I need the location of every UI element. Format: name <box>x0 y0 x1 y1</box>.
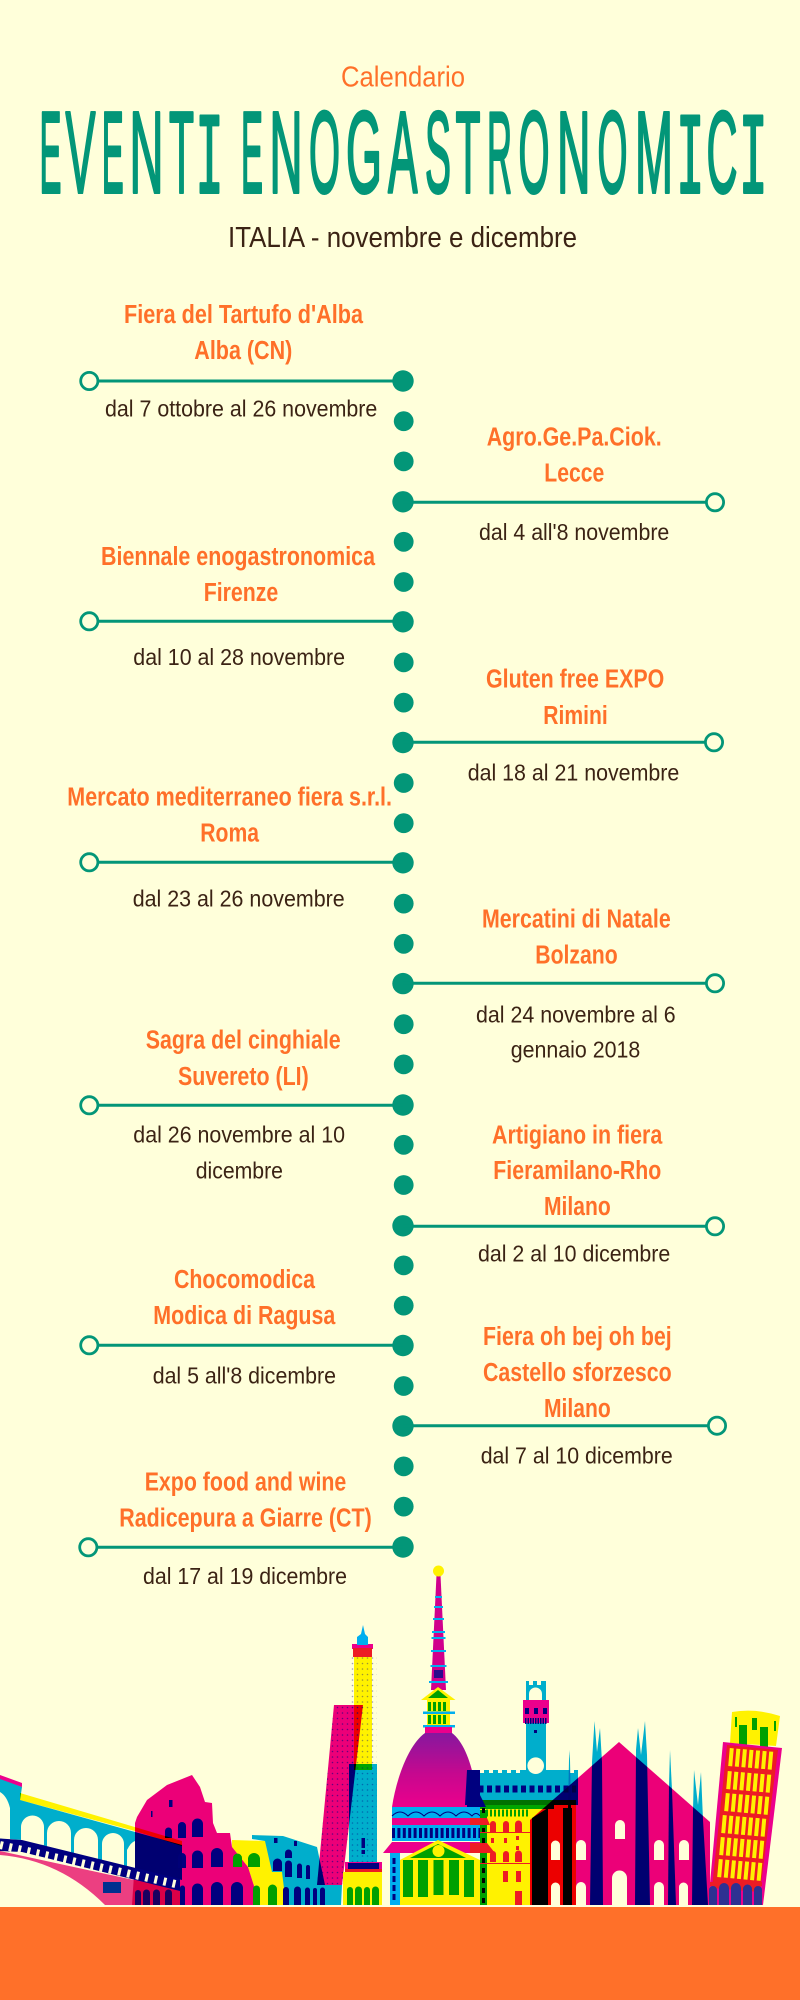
event: Mercato mediterraneo: Roma <box>200 820 260 848</box>
event: Mercato mediterraneo: Mercato mediterraneo fiera s.r.l. <box>67 784 392 812</box>
event: Sagra del cinghiale: dicembre <box>196 1158 283 1184</box>
title: I <box>196 96 224 228</box>
event: Fiera oh bej oh bej: Fiera oh bej oh bej <box>483 1323 672 1351</box>
event: Chocomodica: Chocomodica <box>174 1266 316 1294</box>
event: Fiera del Tartufo d'Alba <box>81 301 403 422</box>
event: Sagra del cinghiale: Suvereto (LI) <box>178 1063 309 1091</box>
title: G <box>346 88 382 218</box>
title: E <box>102 88 124 218</box>
event: Mercato mediterraneo <box>67 784 403 912</box>
title: N <box>270 88 302 218</box>
event: Expo food and wine: Radicepura a Giarre (CT) <box>119 1505 372 1533</box>
landmark: Duomo di Milano <box>530 1721 710 1905</box>
event: Sagra del cinghiale: dal 26 novembre al 10 <box>133 1122 345 1148</box>
event: Artigiano in fiera: Artigiano in fiera <box>492 1121 663 1149</box>
event: Expo food and wine <box>80 1469 403 1589</box>
title: O <box>309 88 340 218</box>
title: A <box>388 88 418 218</box>
event: Fiera oh bej oh bej: Castello sforzesco <box>483 1359 672 1387</box>
title: E <box>40 88 62 218</box>
title: E <box>241 88 263 218</box>
event: Agro.Ge.Pa.Ciok.: dal 4 all'8 novembre <box>479 519 669 545</box>
event: Gluten free EXPO: Rimini <box>543 702 608 730</box>
title: T <box>456 88 480 218</box>
event: Artigiano in fiera <box>403 1121 724 1267</box>
event: Agro.Ge.Pa.Ciok.: Agro.Ge.Pa.Ciok. <box>487 424 662 452</box>
event: Agro.Ge.Pa.Ciok.: Lecce <box>544 460 604 488</box>
event: Biennale enogastronomica: dal 10 al 28 novembre <box>133 644 345 670</box>
event: Fiera del Tartufo d'Alba: Alba (CN) <box>194 337 292 365</box>
event: Gluten free EXPO: dal 18 al 21 novembre <box>468 760 679 786</box>
landmark: Colosseo <box>132 1775 342 1905</box>
event: Chocomodica: Modica di Ragusa <box>153 1302 336 1330</box>
title: O <box>598 88 628 218</box>
skyline illustration <box>0 1566 782 1905</box>
event: Gluten free EXPO: Gluten free EXPO <box>486 666 664 694</box>
event: Artigiano in fiera: dal 2 al 10 dicembre <box>478 1241 670 1267</box>
event: Fiera del Tartufo d'Alba: Fiera del Tartufo d'Alba <box>124 301 364 329</box>
event: Mercatini di Natale <box>403 906 724 1063</box>
event: Gluten free EXPO <box>403 666 723 786</box>
event: Mercatini di Natale: Mercatini di Natale <box>482 906 671 934</box>
title: C <box>706 88 738 218</box>
event: Mercatini di Natale: dal 24 novembre al 6 <box>476 1001 676 1027</box>
title: O <box>518 88 550 218</box>
event: Mercatini di Natale: gennaio 2018 <box>511 1037 640 1063</box>
title: R <box>487 88 512 218</box>
title: N <box>557 88 590 218</box>
title: I <box>676 96 704 228</box>
event: Mercatini di Natale: Bolzano <box>535 942 618 970</box>
title: T <box>169 88 194 218</box>
event: Biennale enogastronomica <box>81 543 403 670</box>
event: Fiera oh bej oh bej: Milano <box>544 1395 611 1423</box>
event: Artigiano in fiera: Milano <box>544 1193 611 1221</box>
event: Fiera oh bej oh bej: dal 7 al 10 dicembre <box>481 1442 673 1468</box>
landmark: Palazzo Vecchio <box>465 1681 578 1905</box>
event: Expo food and wine: Expo food and wine <box>145 1469 346 1497</box>
event: Biennale enogastronomica: Biennale enogastronomica <box>101 543 376 571</box>
event: Biennale enogastronomica: Firenze <box>204 579 278 607</box>
event: Expo food and wine: dal 17 al 19 dicembre <box>143 1563 347 1589</box>
event: Fiera del Tartufo d'Alba: dal 7 ottobre al 26 novembre <box>105 396 377 422</box>
event: Chocomodica: dal 5 all'8 dicembre <box>153 1362 336 1388</box>
title: S <box>425 88 451 218</box>
event: Agro.Ge.Pa.Ciok. <box>403 424 724 545</box>
event: Sagra del cinghiale: Sagra del cinghiale <box>146 1026 341 1054</box>
landmark: Due Torri di Bologna <box>317 1625 382 1905</box>
landmark: Ponte di Rialto <box>0 1775 182 1905</box>
title: N <box>130 88 164 218</box>
event: Chocomodica <box>81 1266 403 1388</box>
subtitle: Calendario: Calendario <box>341 62 465 94</box>
title: V <box>66 88 96 218</box>
event: Fiera oh bej oh bej <box>403 1323 726 1468</box>
event: Sagra del cinghiale <box>81 1026 403 1184</box>
footer band <box>0 1907 800 2000</box>
landmark: Torre di Pisa <box>708 1711 782 1905</box>
subtitle: Italia novembre e dicembre: ITALIA - novembre e dicembre <box>228 222 577 254</box>
timeline dots <box>392 370 414 1558</box>
landmark: Mole Antonelliana <box>383 1566 480 1905</box>
event: Mercato mediterraneo: dal 23 al 26 novembre <box>133 886 345 912</box>
title: M <box>635 88 673 218</box>
event: Artigiano in fiera: Fieramilano-Rho <box>493 1157 661 1185</box>
